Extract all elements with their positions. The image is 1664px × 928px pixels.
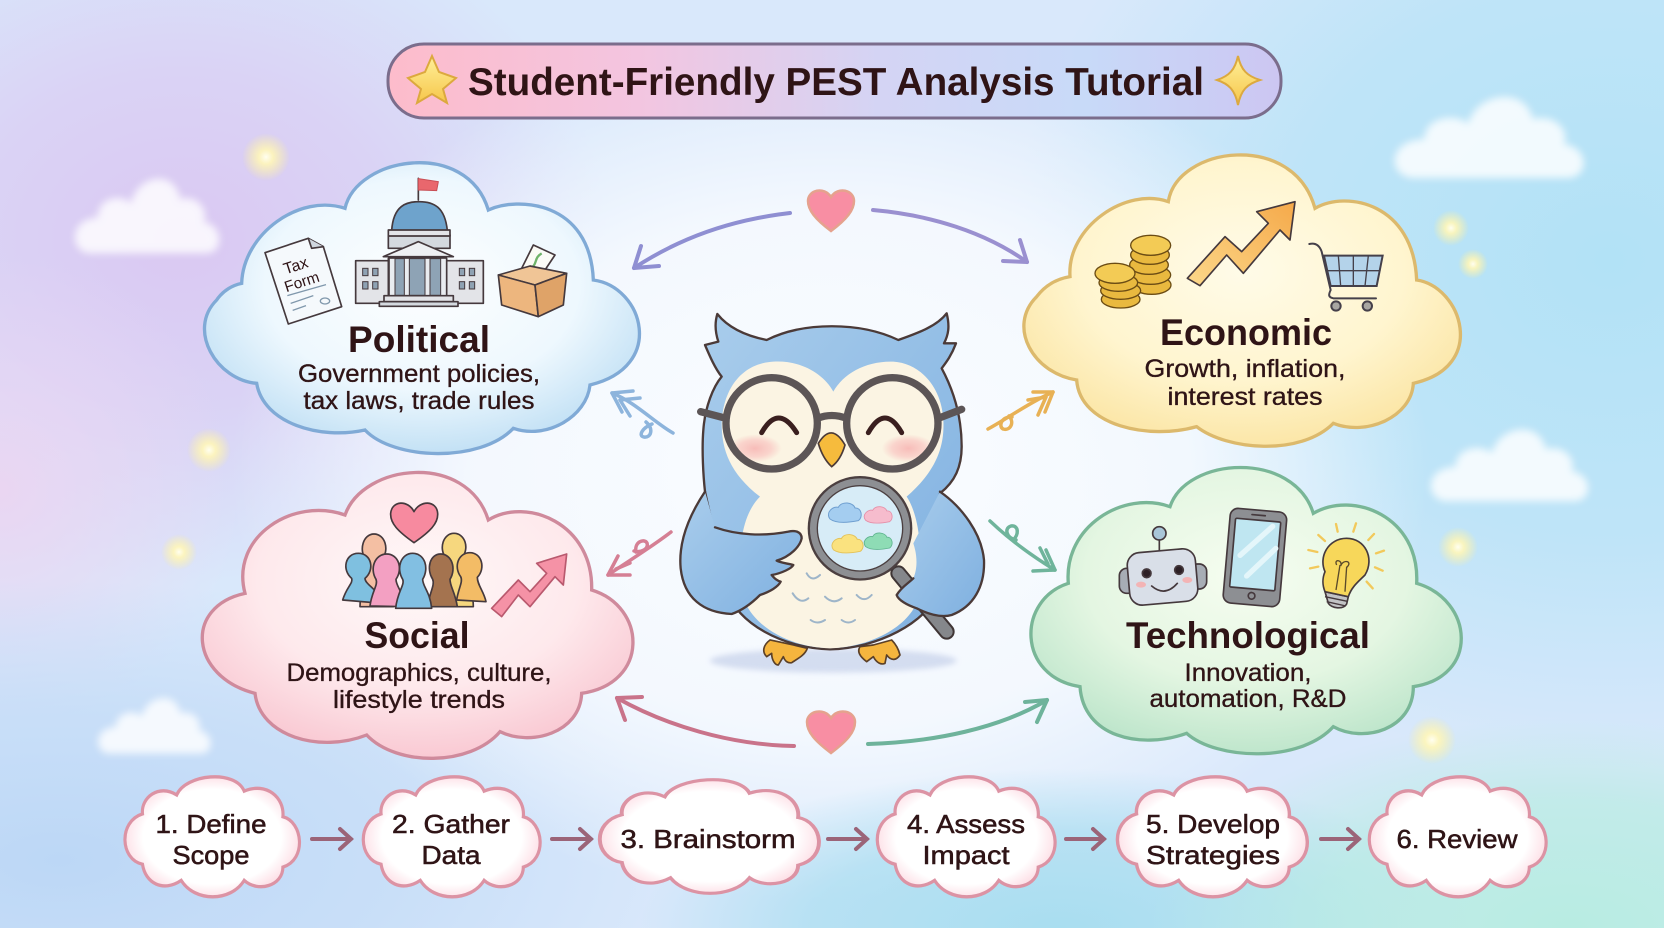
process: step 6 bbox=[1369, 777, 1546, 897]
icon: robot bbox=[1119, 527, 1207, 606]
text: social description: lifestyle trends bbox=[333, 686, 505, 714]
heading: economic: Economic bbox=[1160, 312, 1332, 353]
icon: growth arrow bbox=[1187, 202, 1295, 286]
panel: technological bbox=[1031, 467, 1461, 754]
title banner bbox=[388, 44, 1281, 118]
process: step 1 bbox=[125, 777, 299, 897]
panel: political bbox=[204, 163, 639, 454]
arrow: top left purple bbox=[634, 213, 790, 268]
text: political description: tax laws, trade rules bbox=[304, 387, 534, 415]
process arrow 3 bbox=[828, 829, 867, 849]
sparkle glows bbox=[161, 133, 1488, 764]
process: step 2: 2. Gather bbox=[392, 809, 510, 839]
squiggle arrow: to technological bbox=[990, 521, 1055, 571]
process: step 4 bbox=[877, 777, 1055, 897]
icon: top heart bbox=[808, 190, 854, 231]
process arrow 4 bbox=[1066, 829, 1104, 849]
owl beak bbox=[818, 433, 845, 467]
owl feet bbox=[764, 640, 900, 665]
decorative background clouds bbox=[75, 97, 1588, 754]
process arrow 1 bbox=[312, 829, 351, 849]
heading: political: Political bbox=[348, 319, 490, 360]
arrow: top right purple bbox=[873, 210, 1027, 262]
owl face and belly bbox=[722, 362, 943, 648]
process arrow 5 bbox=[1321, 829, 1359, 849]
text: social description: Demographics, culture, bbox=[286, 659, 552, 687]
heading: technological: Technological bbox=[1126, 615, 1370, 656]
icon: tax form: Form bbox=[282, 269, 322, 296]
mini cloud: political bbox=[828, 503, 861, 522]
panel: economic bbox=[1024, 155, 1460, 446]
owl chest feathers bbox=[793, 573, 872, 622]
title star left bbox=[408, 56, 456, 103]
owl mascot with magnifying glass bbox=[680, 313, 984, 673]
process: step 2 bbox=[363, 777, 540, 897]
owl eyes bbox=[762, 418, 902, 433]
owl left wing bbox=[680, 492, 802, 614]
icon: heart bbox=[391, 503, 438, 543]
squiggle arrow: to social bbox=[608, 532, 671, 575]
process: step 1: 1. Define bbox=[156, 809, 266, 839]
owl glasses bbox=[701, 378, 962, 469]
owl cheeks bbox=[728, 434, 935, 462]
owl body bbox=[703, 313, 962, 649]
process: step 1: Scope bbox=[172, 840, 250, 870]
process: step 2: Data bbox=[422, 840, 481, 870]
process: step 4: 4. Assess bbox=[907, 809, 1025, 839]
magnifying glass handle bbox=[898, 573, 947, 632]
process: step 5: 5. Develop bbox=[1146, 809, 1280, 839]
process: step 3: 3. Brainstorm bbox=[620, 824, 796, 854]
arrow: bottom left pink bbox=[617, 697, 794, 746]
panel: social bbox=[202, 472, 633, 758]
text: political description bbox=[298, 360, 540, 415]
text: technological description bbox=[1150, 659, 1346, 713]
icon: pink trend arrow bbox=[492, 554, 567, 617]
text: economic description: Growth, inflation, bbox=[1144, 355, 1346, 383]
process: step 6: 6. Review bbox=[1396, 824, 1518, 854]
squiggle arrow: to political bbox=[612, 391, 673, 437]
magnifying glass lens bbox=[808, 476, 912, 581]
process: step 4: Impact bbox=[922, 840, 1010, 870]
process: step 5 bbox=[1117, 777, 1307, 897]
icon: bottom heart bbox=[807, 711, 855, 753]
icon: ballot box bbox=[498, 245, 567, 317]
icon: group of people bbox=[343, 533, 486, 608]
owl right wing bbox=[897, 492, 984, 616]
text: economic description: interest rates bbox=[1168, 383, 1322, 411]
icon: tax form bbox=[265, 238, 342, 324]
process arrow 2 bbox=[552, 829, 591, 849]
text: technological description: Innovation, bbox=[1184, 659, 1312, 687]
arrow: bottom right green bbox=[868, 700, 1047, 744]
owl shadow bbox=[710, 649, 957, 673]
process: step 3 bbox=[600, 780, 819, 893]
text: social description bbox=[286, 659, 552, 714]
text: economic description bbox=[1144, 355, 1346, 411]
text: political description: Government policies, bbox=[298, 360, 540, 388]
mini cloud: technological bbox=[864, 533, 892, 549]
icon: tax form: Tax bbox=[281, 254, 310, 278]
icon: shopping cart bbox=[1309, 244, 1383, 311]
text: technological description: automation, R&D bbox=[1150, 685, 1346, 713]
icon: light bulb bbox=[1308, 523, 1384, 608]
icon: coins bbox=[1095, 235, 1171, 308]
title text: Student-Friendly PEST Analysis Tutorial bbox=[468, 61, 1204, 104]
mini cloud: economic bbox=[832, 535, 863, 553]
icon: smartphone bbox=[1223, 508, 1287, 607]
process: step 5: Strategies bbox=[1146, 840, 1280, 870]
mini cloud: social bbox=[864, 507, 892, 523]
heading: social: Social bbox=[364, 615, 470, 656]
title star right bbox=[1217, 56, 1260, 105]
squiggle arrow: to economic bbox=[988, 392, 1053, 429]
icon: capitol building bbox=[356, 178, 483, 306]
